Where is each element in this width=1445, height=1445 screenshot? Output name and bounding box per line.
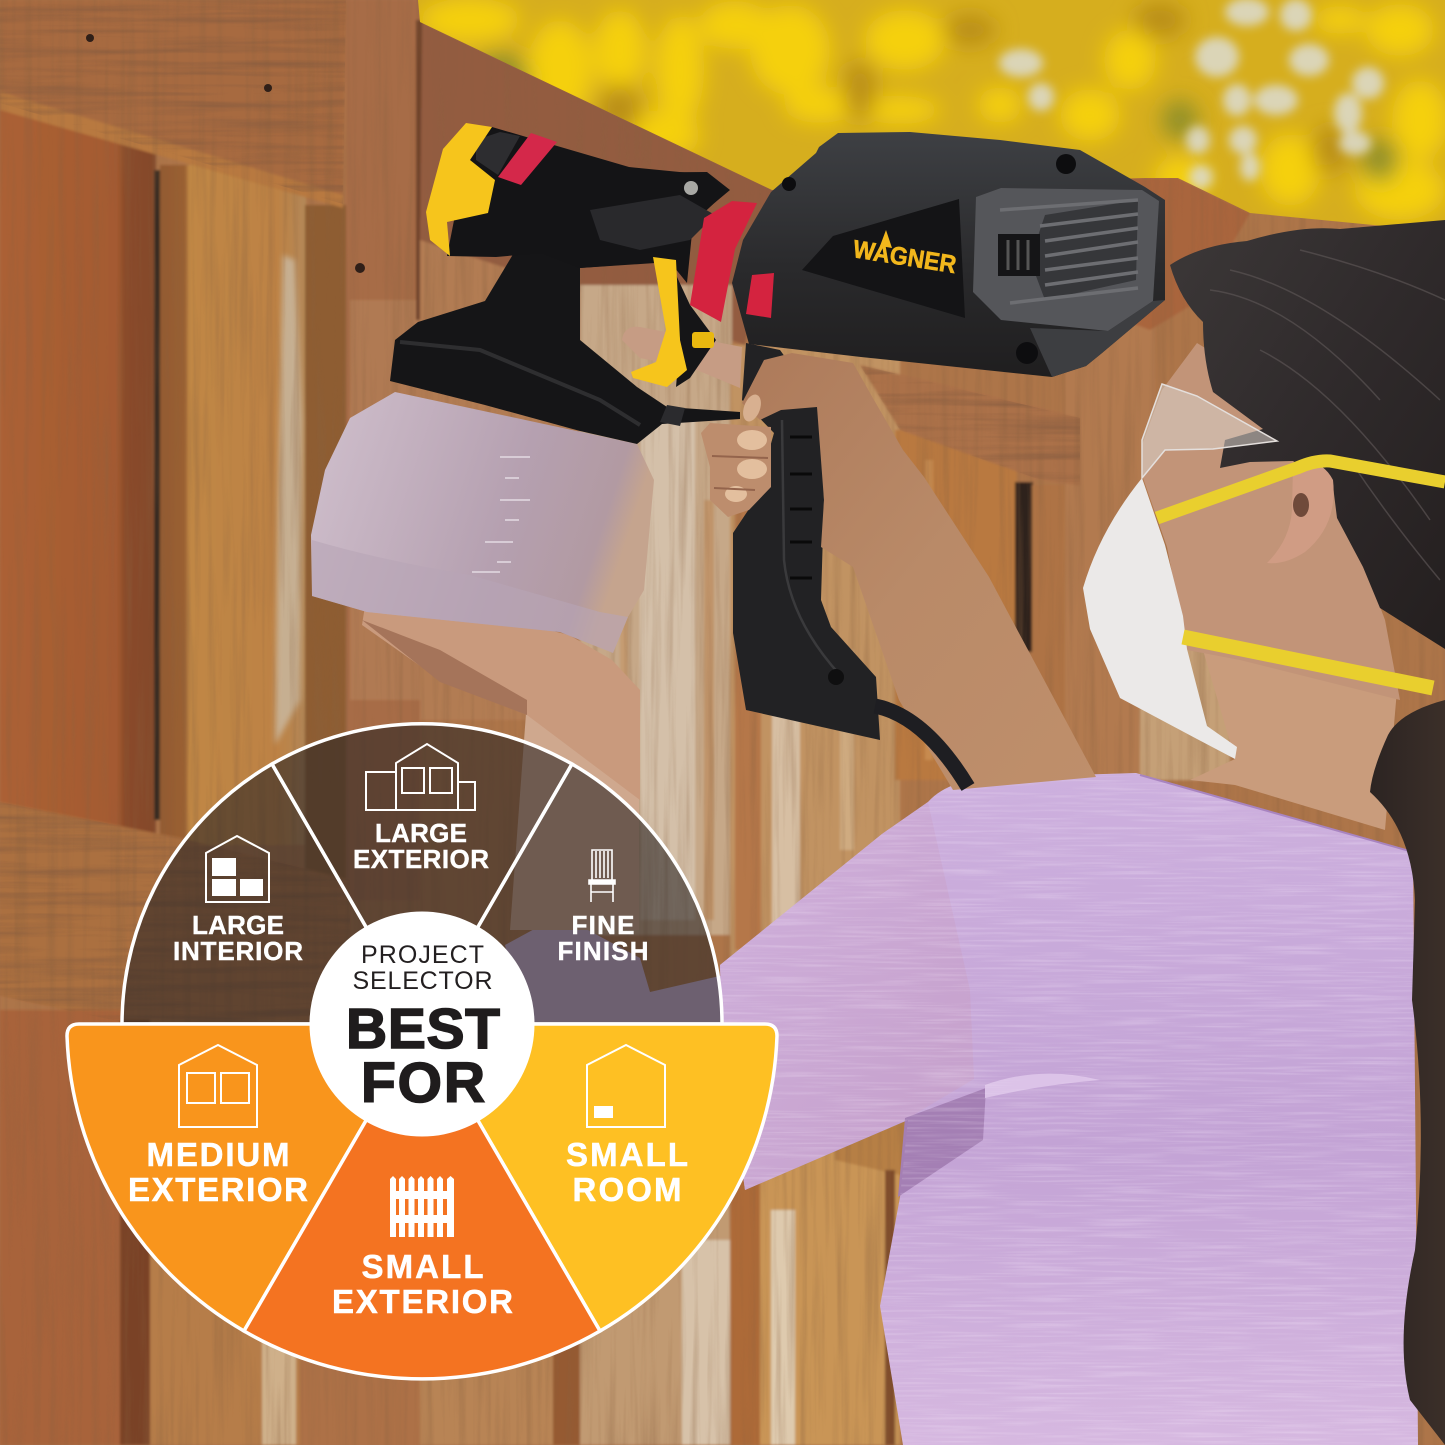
label: medium exterior: EXTERIOR [128,1171,308,1208]
grille panel [973,188,1159,331]
icon: small room house [587,1045,665,1127]
badge subtitle: SELECTOR [352,967,492,995]
segment: fine finish [422,764,722,1024]
label: small exterior: SMALL [362,1248,484,1285]
icon: large exterior house [366,744,475,810]
red tab [498,133,557,185]
red button [746,273,774,318]
segment: large interior [122,764,422,1024]
centre badge [310,912,534,1136]
cup lid and stem [390,172,740,444]
label: large interior: LARGE [192,910,284,940]
icon: chair [589,850,615,902]
upper left planks [0,95,156,835]
nozzle black ring [476,132,520,175]
label: large exterior: EXTERIOR [353,844,489,874]
ponytail [1370,700,1445,1445]
yellow nozzle [426,123,495,256]
black trigger guard [670,262,716,387]
fingers [701,392,771,517]
badge subtitle: PROJECT [361,941,484,969]
project selector wheel [67,724,777,1379]
label: large interior: INTERIOR [173,936,303,966]
cable [875,706,968,787]
motor body [732,132,1165,377]
woman: shirt [505,773,1418,1445]
label: small room: SMALL [566,1136,688,1173]
paint cup [311,392,654,653]
respirator mask [1083,478,1237,759]
woman: raised forearm and lower hand [362,327,742,930]
label: large exterior: LARGE [375,818,467,848]
mask straps [1157,461,1445,518]
badge title: BEST [346,997,500,1061]
label: small room: ROOM [572,1171,682,1208]
label: small exterior: EXTERIOR [332,1283,513,1320]
gripping hand and forearm [742,353,1096,790]
middle planks [580,285,732,935]
badge title: FOR [361,1051,485,1115]
icon: medium exterior house [179,1045,257,1127]
pistol grip [733,343,880,740]
upper segments [122,724,722,1024]
yellow trigger [631,257,687,387]
safety goggles [1142,384,1277,478]
ear [1267,463,1334,563]
segment: medium exterior [67,1024,422,1331]
label: fine finish: FINE [572,910,634,940]
paint sprayer [311,123,1165,790]
segment: small room [422,1024,777,1331]
icon: picket fence [390,1176,454,1237]
strap clip [660,405,685,426]
segment: small exterior [244,1024,600,1379]
weathered streak [275,255,302,745]
Wagner logo: WAGNER [851,235,958,279]
background: yellow autumn foliage [400,0,1445,240]
red ring [690,201,757,322]
woman: head, neck and hair [1083,220,1445,1445]
lower left rail and planks [0,802,350,1022]
label: medium exterior: MEDIUM [146,1136,290,1173]
logo panel [802,199,965,318]
icon: large interior house [206,836,269,902]
knots [86,34,365,273]
segment: large exterior [272,724,572,1024]
label: fine finish: FINISH [558,936,648,966]
barrel [447,127,726,283]
